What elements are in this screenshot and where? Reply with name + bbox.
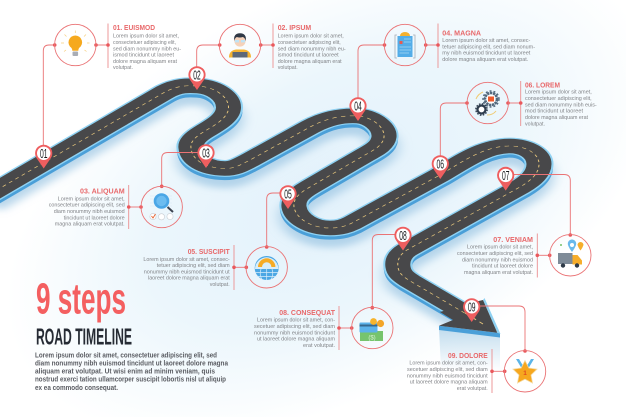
text: 05 suscipit: Lorem ipsum dolor sit amet, consec- (143, 257, 230, 263)
icon: light bulb (55, 24, 96, 66)
text: 04 magna: 04. MAGNA (442, 29, 482, 38)
text: 08 consequat: erat volutpat. (303, 343, 335, 349)
text: 05 suscipit: nonummy nibh euismod tincidunt ut (144, 269, 230, 275)
text: 02 ipsum: 02. IPSUM (278, 23, 311, 32)
icon: medal star: 1 (523, 370, 527, 377)
text: 01 euismod: ismod tincidunt ut laoreet (113, 53, 174, 59)
text: 01 euismod: 01. EUISMOD (113, 23, 156, 32)
pin 02: 02 (193, 68, 201, 82)
text: 09 dolore: 09. DOLORE (448, 351, 488, 360)
pin 01 (35, 145, 52, 168)
text: 09 dolore: ut laoreet dolore magna aliquam (410, 380, 488, 386)
pin 07: 07 (502, 169, 509, 183)
pin 02 (188, 66, 206, 90)
text: 09 dolore (407, 351, 488, 392)
pin 03: 03 (202, 146, 210, 160)
step 04 connector (358, 24, 440, 98)
text: 07 veniam: Lorem ipsum dolor sit amet, (467, 244, 533, 250)
text: 06 lorem: volutpat. (525, 121, 545, 127)
icon: globe with gear (246, 247, 287, 288)
text: 02 ipsum (278, 23, 346, 71)
pin 04 (349, 97, 367, 121)
text: 09 dolore: erat volutpat. (457, 386, 488, 392)
pin 08: 08 (399, 229, 407, 243)
text: 08 consequat: secetuer adipiscing elit, sed diam (254, 324, 335, 330)
text: 03 aliquam: consectetuer adipiscing elit, sed (49, 202, 125, 208)
text: 07 veniam: consectetuer adipiscing elit, sed (457, 251, 533, 257)
text: 05 suscipit: tetuer adipiscing elit, sed diam (157, 263, 230, 269)
text: 06 lorem: Lorem ipsum dolor sit amet, (525, 90, 592, 96)
icon: delivery truck (550, 235, 591, 276)
intro paragraph: aliquam erat volutpat. Ut wisi enim ad minim veniam, quis (35, 369, 215, 376)
text: 02 ipsum: volutpat. (278, 65, 298, 71)
text: 03 aliquam: diam nonummy nibh euismod (54, 209, 125, 215)
text: 06 lorem (525, 80, 597, 127)
text: 04 magna: tetuer adipiscing elit, sed diam nonum- (442, 44, 535, 50)
step 01 connector (43, 24, 110, 146)
text: 08 consequat: 08. CONSEQUAT (279, 308, 335, 317)
pin 04: 04 (354, 99, 362, 113)
pin 03 (197, 144, 215, 168)
text: 05 suscipit: 05. SUSCIPIT (188, 247, 230, 256)
text: 03 aliquam (49, 186, 125, 228)
text: 01 euismod: Lorem ipsum dolor sit amet, (113, 34, 179, 40)
pin 07 (497, 167, 514, 191)
text: 08 consequat: ut laoreet dolore magna aliquam (257, 337, 335, 343)
icon: man at laptop (219, 24, 261, 66)
icon: medal star (504, 351, 546, 392)
road (0, 86, 539, 372)
intro paragraph: Lorem ipsum dolor sit amet, consectetuer adipiscing elit, sed (35, 352, 217, 359)
pin 06 (432, 155, 449, 179)
text: 05 suscipit: volutpat. (210, 282, 230, 288)
step 09 connector (478, 306, 527, 393)
title: 9 steps: 9 steps (36, 275, 126, 324)
text: 09 dolore: Lorem ipsum dolor sit amet, con- (409, 361, 488, 367)
text: 06 lorem: sed diam nonummy nibh euis- (525, 102, 597, 108)
icon: card and cash: ($) (368, 336, 376, 342)
step 05 connector (232, 193, 282, 290)
step 07 connector (511, 174, 572, 278)
step 08 connector (337, 234, 398, 350)
text: 07 veniam: tincidunt ut laoreet dolore (472, 264, 533, 270)
text: 09 dolore: nonummy nibh euismod tincidunt (407, 373, 488, 379)
text: 03 aliquam: magna aliquam erat volutpat. (55, 222, 125, 228)
text: 02 ipsum: consectetuer adipiscing elit, (278, 40, 341, 46)
pin 05 (279, 185, 297, 209)
icon: card and cash (352, 307, 393, 349)
text: 03 aliquam: 03. ALIQUAM (80, 186, 125, 196)
text: 04 magna (442, 29, 535, 63)
text: 01 euismod: dolore magna aliquam erat (113, 59, 177, 65)
intro paragraph: diam nonummy nibh euismod tincidunt ut laoreet dolore magna (35, 360, 228, 367)
text: 03 aliquam: Lorem ipsum dolor sit amet, (58, 196, 125, 202)
text: 04 magna: dolore magna aliquam erat volutpat. (442, 57, 529, 63)
pin 01: 01 (40, 147, 47, 161)
subtitle: road timeline: ROAD TIMELINE (36, 323, 132, 349)
text: 02 ipsum: dolore magna aliquam erat (278, 59, 342, 65)
text: 09 dolore: secetuer adipiscing elit, sed diam (407, 367, 488, 373)
text: 07 veniam: diam nonummy nibh euismod (462, 257, 533, 263)
text: 04 magna: Lorem ipsum dolor sit amet, consec- (442, 38, 530, 44)
text: 07 veniam (457, 235, 533, 276)
road arrowhead (439, 298, 500, 338)
step 06 connector (440, 81, 522, 156)
text: 01 euismod: volutpat. (113, 65, 133, 71)
text: 06 lorem: consectetuer adipiscing elit, (525, 96, 592, 102)
text: 01 euismod: consectetuer adipiscing elit, (113, 40, 176, 46)
text: 05 suscipit: laoreet dolore magna aliquam erat (148, 276, 230, 282)
text: 02 ipsum: ismod tincidunt ut laoreet (278, 53, 339, 59)
text: 06 lorem: mod tincidunt ut laoreet (525, 109, 583, 115)
text: 08 consequat: nonummy nibh euismod tincidunt (254, 330, 335, 336)
pin 06: 06 (437, 157, 444, 171)
intro paragraph: nostrud exerci tation ullamcorper suscipit lobortis nisl ut aliquip (35, 377, 226, 384)
text: 07 veniam: 07. VENIAM (493, 235, 533, 244)
icon: gears (467, 82, 508, 124)
pin 08 (394, 227, 412, 250)
text: 07 veniam: magna aliquam erat volutpat. (464, 270, 533, 276)
text: 05 suscipit (143, 247, 230, 288)
text: 03 aliquam: tincidunt ut laoreet dolore (64, 215, 125, 221)
intro paragraph (35, 352, 228, 392)
text: 01 euismod: sed diam nonummy nibh eu- (113, 46, 181, 52)
icon: magnifier and checklist (141, 186, 182, 228)
icon: clipboard (384, 24, 426, 66)
intro paragraph: ex ea commodo consequat. (35, 385, 118, 392)
text: 01 euismod (113, 23, 181, 71)
step 02 connector (197, 24, 275, 68)
text: 02 ipsum: Lorem ipsum dolor sit amet, (278, 34, 344, 40)
pin 05: 05 (284, 187, 292, 201)
text: 06 lorem: 06. LOREM (525, 80, 560, 90)
text: 02 ipsum: sed diam nonummy nibh eu- (278, 46, 346, 52)
text: 08 consequat: Lorem ipsum dolor sit amet, con- (257, 318, 335, 324)
text: 04 magna: my nibh euismod tincidunt ut laoreet (442, 51, 531, 57)
text: 06 lorem: dolore magna aliquam erat (525, 115, 588, 121)
text: 08 consequat (254, 308, 335, 349)
pin 09 (463, 298, 480, 322)
step 03 connector (127, 152, 198, 229)
pin 09: 09 (468, 300, 475, 314)
